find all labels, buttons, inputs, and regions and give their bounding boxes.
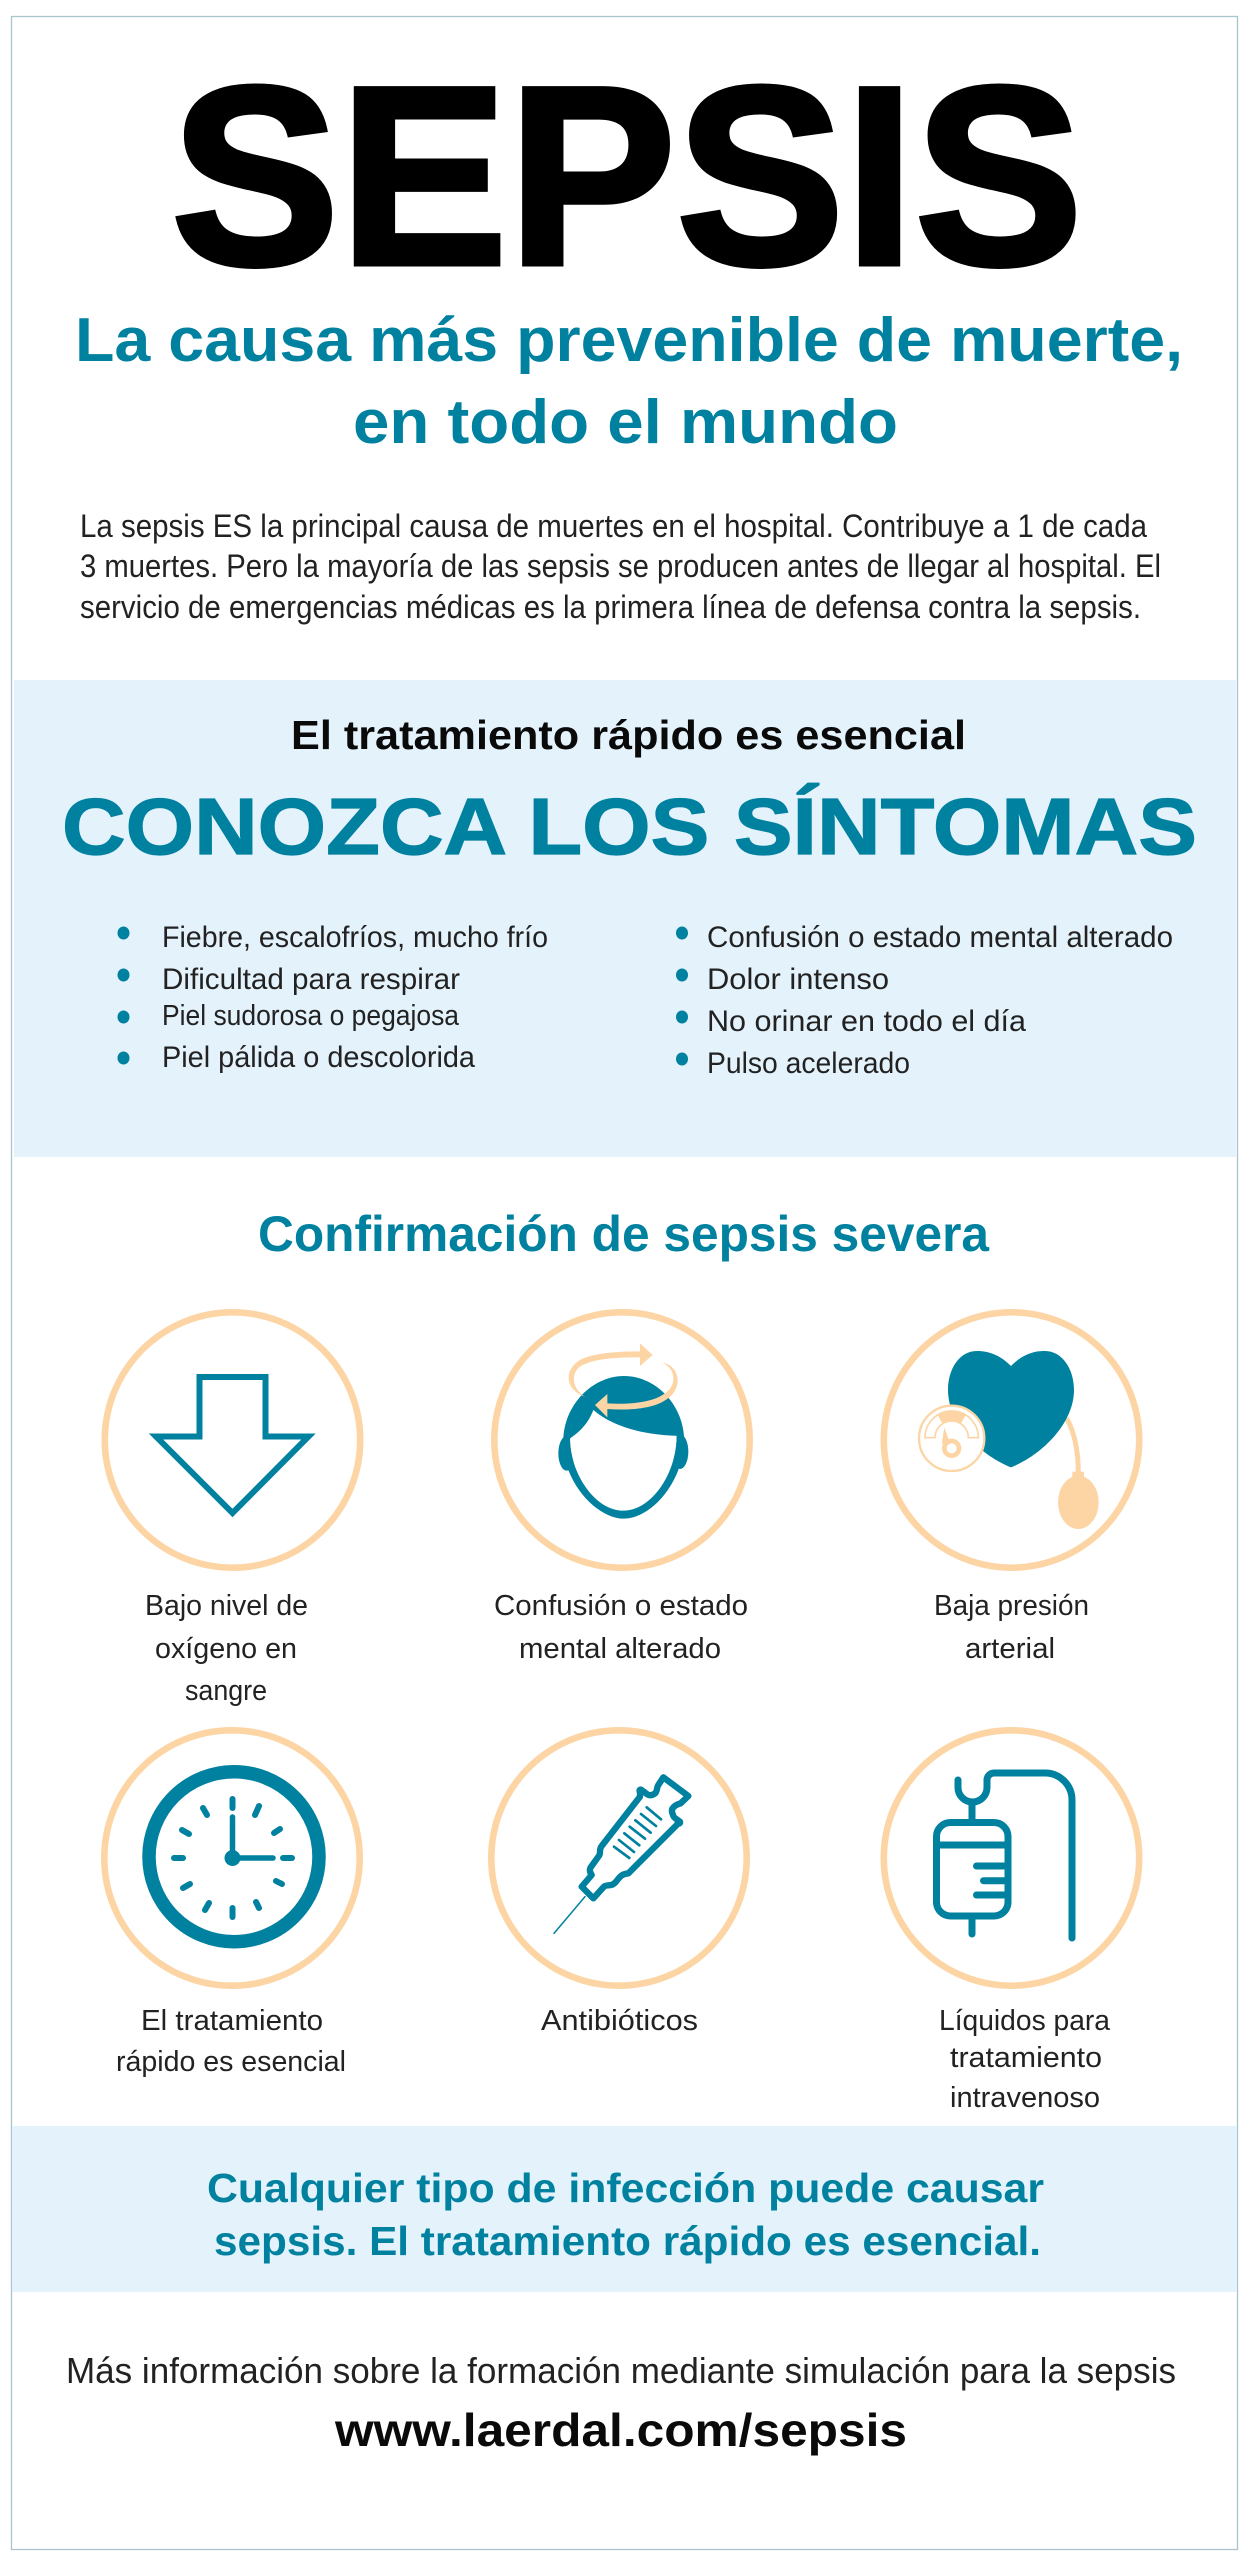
callout text: Cualquier tipo de infección puede causar	[207, 2165, 1044, 2211]
footer url: www.laerdal.com/sepsis	[334, 2404, 907, 2456]
symptoms list: left column: Piel pálida o descolorida	[162, 1041, 475, 1074]
icon: low blood pressure	[884, 1312, 1139, 1568]
label: IV fluids: intravenoso	[950, 2082, 1100, 2114]
label: confusion: mental alterado	[519, 1633, 721, 1665]
label: low blood pressure: Baja presión	[934, 1590, 1089, 1622]
icon: low oxygen arrow	[105, 1312, 360, 1568]
symptoms list: left column: Fiebre, escalofríos, mucho frío	[162, 921, 548, 954]
label: IV fluids	[939, 2005, 1111, 2114]
label: time: El tratamiento	[141, 2005, 323, 2037]
label: confusion: Confusión o estado	[494, 1590, 748, 1622]
footer text: Más información sobre la formación mediante simulación para la sepsis	[66, 2350, 1176, 2391]
icon: clock	[104, 1730, 360, 1986]
title: SEPSIS	[171, 34, 1083, 319]
symptoms list: left column	[118, 921, 548, 1074]
symptoms list: left column: Piel sudorosa o pegajosa	[162, 1000, 460, 1032]
intro paragraph: La sepsis ES la principal causa de muertes en el hospital. Contribuye a 1 de cada	[80, 508, 1147, 544]
label: time: rápido es esencial	[116, 2046, 346, 2078]
label: antibiotics: Antibióticos	[541, 2005, 698, 2037]
icon: confusion head	[494, 1312, 750, 1568]
callout text: sepsis. El tratamiento rápido es esencial.	[214, 2218, 1041, 2264]
label: low blood pressure: arterial	[965, 1633, 1055, 1665]
label: IV fluids: Líquidos para	[939, 2005, 1111, 2037]
subtitle: La causa más prevenible de muerte,	[75, 306, 1183, 375]
intro paragraph: 3 muertes. Pero la mayoría de las sepsis se producen antes de llegar al hospital. El	[80, 548, 1161, 584]
symptoms list: left column: Dificultad para respirar	[162, 963, 460, 996]
label: low blood pressure	[934, 1590, 1089, 1665]
intro paragraph: servicio de emergencias médicas es la primera línea de defensa contra la sepsis.	[80, 589, 1141, 625]
symptoms list: right column: Dolor intenso	[707, 963, 889, 996]
panel: know the symptoms	[14, 680, 1236, 1157]
label: confusion	[494, 1590, 748, 1665]
panel: callout	[12, 2126, 1237, 2292]
symptoms list: right column: Pulso acelerado	[707, 1047, 910, 1080]
symptoms list: right column: Confusión o estado mental alterado	[707, 921, 1173, 954]
subtitle: en todo el mundo	[353, 388, 898, 457]
label: low oxygen: Bajo nivel de	[145, 1590, 308, 1622]
section heading: Confirmación de sepsis severa	[258, 1206, 990, 1262]
subtitle	[75, 306, 1183, 457]
symptoms heading: CONOZCA LOS SÍNTOMAS	[62, 782, 1197, 871]
label: low oxygen: oxígeno en	[155, 1633, 297, 1665]
panel heading: El tratamiento rápido es esencial	[291, 712, 966, 758]
callout text	[207, 2165, 1044, 2264]
icon: IV fluids	[884, 1730, 1139, 1986]
icon: syringe	[491, 1730, 747, 1986]
symptoms list: right column: No orinar en todo el día	[707, 1005, 1026, 1038]
label: low oxygen	[145, 1590, 308, 1707]
label: time	[116, 2005, 346, 2078]
label: low oxygen: sangre	[185, 1675, 267, 1707]
intro paragraph	[80, 508, 1161, 625]
symptoms list: right column	[676, 921, 1173, 1080]
label: IV fluids: tratamiento	[950, 2042, 1102, 2074]
